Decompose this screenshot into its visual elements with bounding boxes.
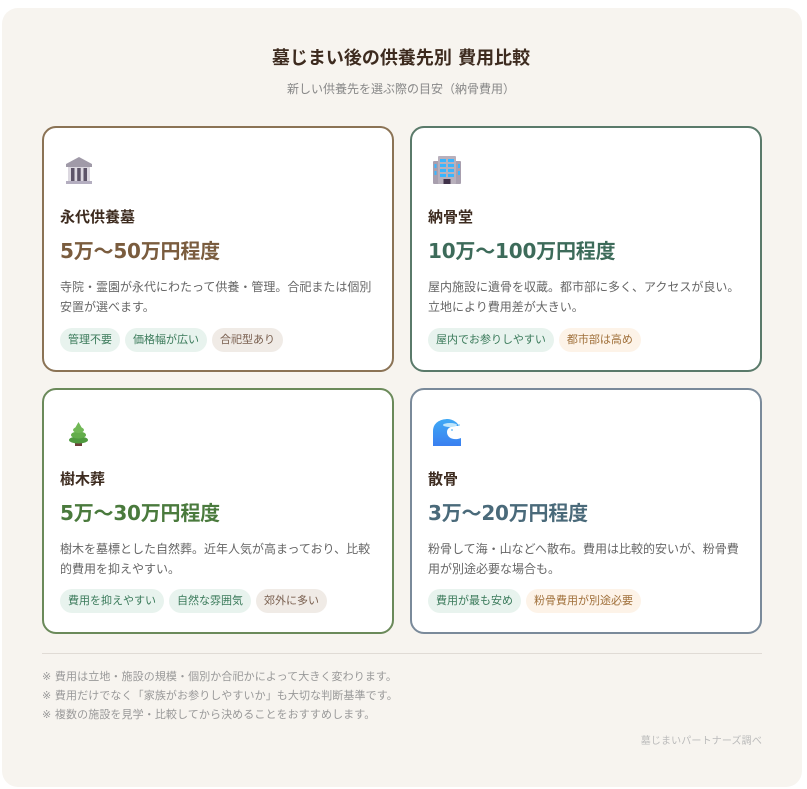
tags: 管理不要 — [68, 333, 112, 346]
name: 永代供養墓 — [60, 208, 135, 226]
panel: 納骨堂 — [410, 126, 762, 372]
tags: 価格幅が広い — [133, 333, 199, 346]
description: 粉骨して海・山などへ散布。費用は比較的安いが、粉骨費用が別途必要な場合も。 — [428, 542, 739, 576]
tags: 郊外に多い — [264, 594, 319, 607]
panel: 永代供養墓 — [42, 126, 394, 372]
footnotes: ※ 費用は立地・施設の規模・個別か合祀かによって大きく変わります。 — [42, 670, 397, 683]
footnotes: ※ 複数の施設を見学・比較してから決めることをおすすめします。 — [42, 708, 375, 721]
icon: classical building — [66, 157, 92, 184]
tags: 費用が最も安め — [436, 594, 513, 607]
tags — [60, 589, 327, 613]
panel: 散骨 — [410, 388, 762, 634]
description: 寺院・霊園が永代にわたって供養・管理。合祀または個別安置が選べます。 — [60, 280, 371, 314]
tags — [428, 589, 641, 613]
footnotes — [42, 670, 398, 721]
panel: 樹木葬 — [42, 388, 394, 634]
name: 樹木葬 — [60, 470, 105, 488]
source: 墓じまいパートナーズ調べ — [641, 736, 762, 747]
tags: 費用を抑えやすい — [68, 594, 156, 607]
icon: office building — [433, 156, 461, 184]
name: 散骨 — [428, 470, 458, 488]
name: 納骨堂 — [428, 208, 473, 226]
icon: evergreen tree — [69, 422, 88, 446]
tags: 自然な雰囲気 — [177, 594, 243, 607]
tags: 粉骨費用が別途必要 — [534, 594, 633, 607]
icon: water wave — [433, 419, 461, 446]
description: 樹木を墓標とした自然葬。近年人気が高まっており、比較的費用を抑えやすい。 — [60, 542, 370, 576]
tags — [428, 328, 641, 352]
tags: 合祀型あり — [220, 333, 275, 346]
title: 墓じまい後の供養先別 費用比較 — [272, 48, 530, 69]
tags: 屋内でお参りしやすい — [436, 333, 546, 346]
price: 3万～20万円程度 — [428, 501, 588, 525]
price: 10万～100万円程度 — [428, 239, 615, 263]
description: 屋内施設に遺骨を収蔵。都市部に多く、アクセスが良い。立地により費用差が大きい。 — [428, 280, 739, 314]
price: 5万～30万円程度 — [60, 501, 220, 525]
subtitle: 新しい供養先を選ぶ際の目安（納骨費用） — [287, 82, 515, 96]
price: 5万～50万円程度 — [60, 239, 220, 263]
tags: 都市部は高め — [567, 333, 633, 346]
footnotes: ※ 費用だけでなく「家族がお参りしやすいか」も大切な判断基準です。 — [42, 689, 398, 702]
tags — [60, 328, 283, 352]
